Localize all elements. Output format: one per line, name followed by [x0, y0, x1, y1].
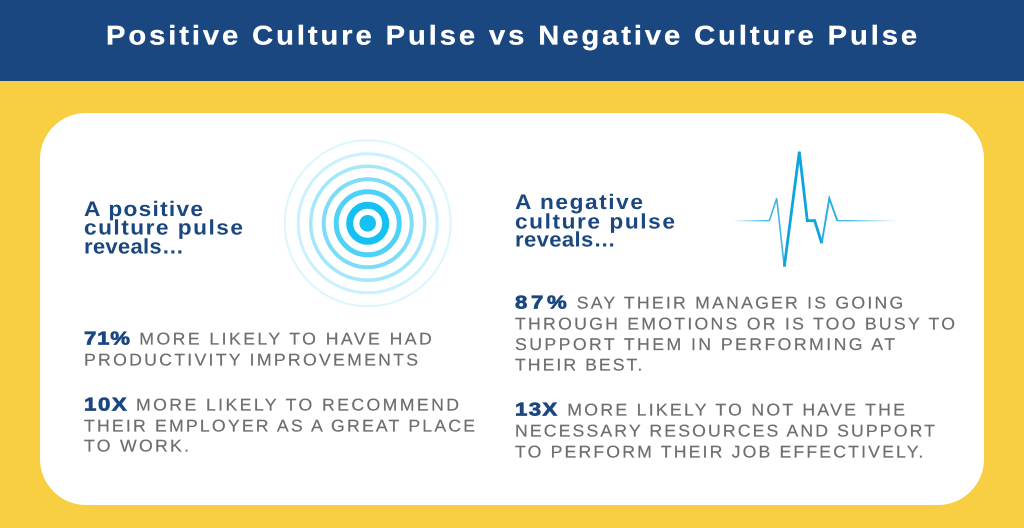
stat: 13X — [515, 399, 935, 461]
heading: negative: A negative — [515, 191, 643, 214]
stat: 71% — [84, 327, 432, 369]
stat: 87% — [515, 291, 955, 375]
stat: 13X: NECESSARY RESOURCES AND SUPPORT — [515, 422, 935, 441]
heading: positive: reveals… — [84, 235, 184, 258]
heading: positive: culture pulse — [84, 216, 243, 240]
stat: 71%: MORE LIKELY TO HAVE HAD — [139, 329, 432, 348]
stat: 87%: SUPPORT THEM IN PERFORMING AT — [515, 335, 895, 354]
heading: positive: A positive — [84, 198, 203, 221]
icon: concentric pulse rings — [285, 140, 451, 306]
heading: negative: culture pulse — [515, 210, 675, 233]
stat: 87%: THROUGH EMOTIONS OR IS TOO BUSY TO — [515, 314, 955, 333]
stat: 10X — [84, 393, 475, 456]
stat: 10X: THEIR EMPLOYER AS A GREAT PLACE — [84, 416, 475, 436]
stat: 13X: TO PERFORM THEIR JOB EFFECTIVELY. — [515, 442, 923, 461]
stat: 13X: 13X — [515, 399, 558, 420]
panel: negative culture pulse — [515, 152, 955, 461]
heading: negative: reveals… — [515, 229, 616, 252]
heading: positive — [84, 198, 243, 258]
title: Positive Culture Pulse vs Negative Culture Pulse — [106, 20, 917, 50]
white card — [40, 113, 984, 505]
header band — [0, 0, 1024, 81]
stat: 13X: MORE LIKELY TO NOT HAVE THE — [567, 401, 905, 420]
stat: 87%: SAY THEIR MANAGER IS GOING — [577, 293, 903, 312]
stat: 71%: 71% — [84, 327, 130, 348]
heading: negative — [515, 191, 675, 252]
panel: positive culture pulse — [84, 140, 475, 456]
stat: 10X: 10X — [84, 393, 128, 414]
stat: 71%: PRODUCTIVITY IMPROVEMENTS — [84, 350, 418, 369]
stat: 10X: TO WORK. — [84, 437, 189, 456]
stat: 10X: MORE LIKELY TO RECOMMEND — [136, 395, 459, 414]
icon: heartbeat line — [732, 152, 897, 267]
stat: 87%: 87% — [515, 291, 567, 312]
stat: 87%: THEIR BEST. — [515, 356, 642, 375]
